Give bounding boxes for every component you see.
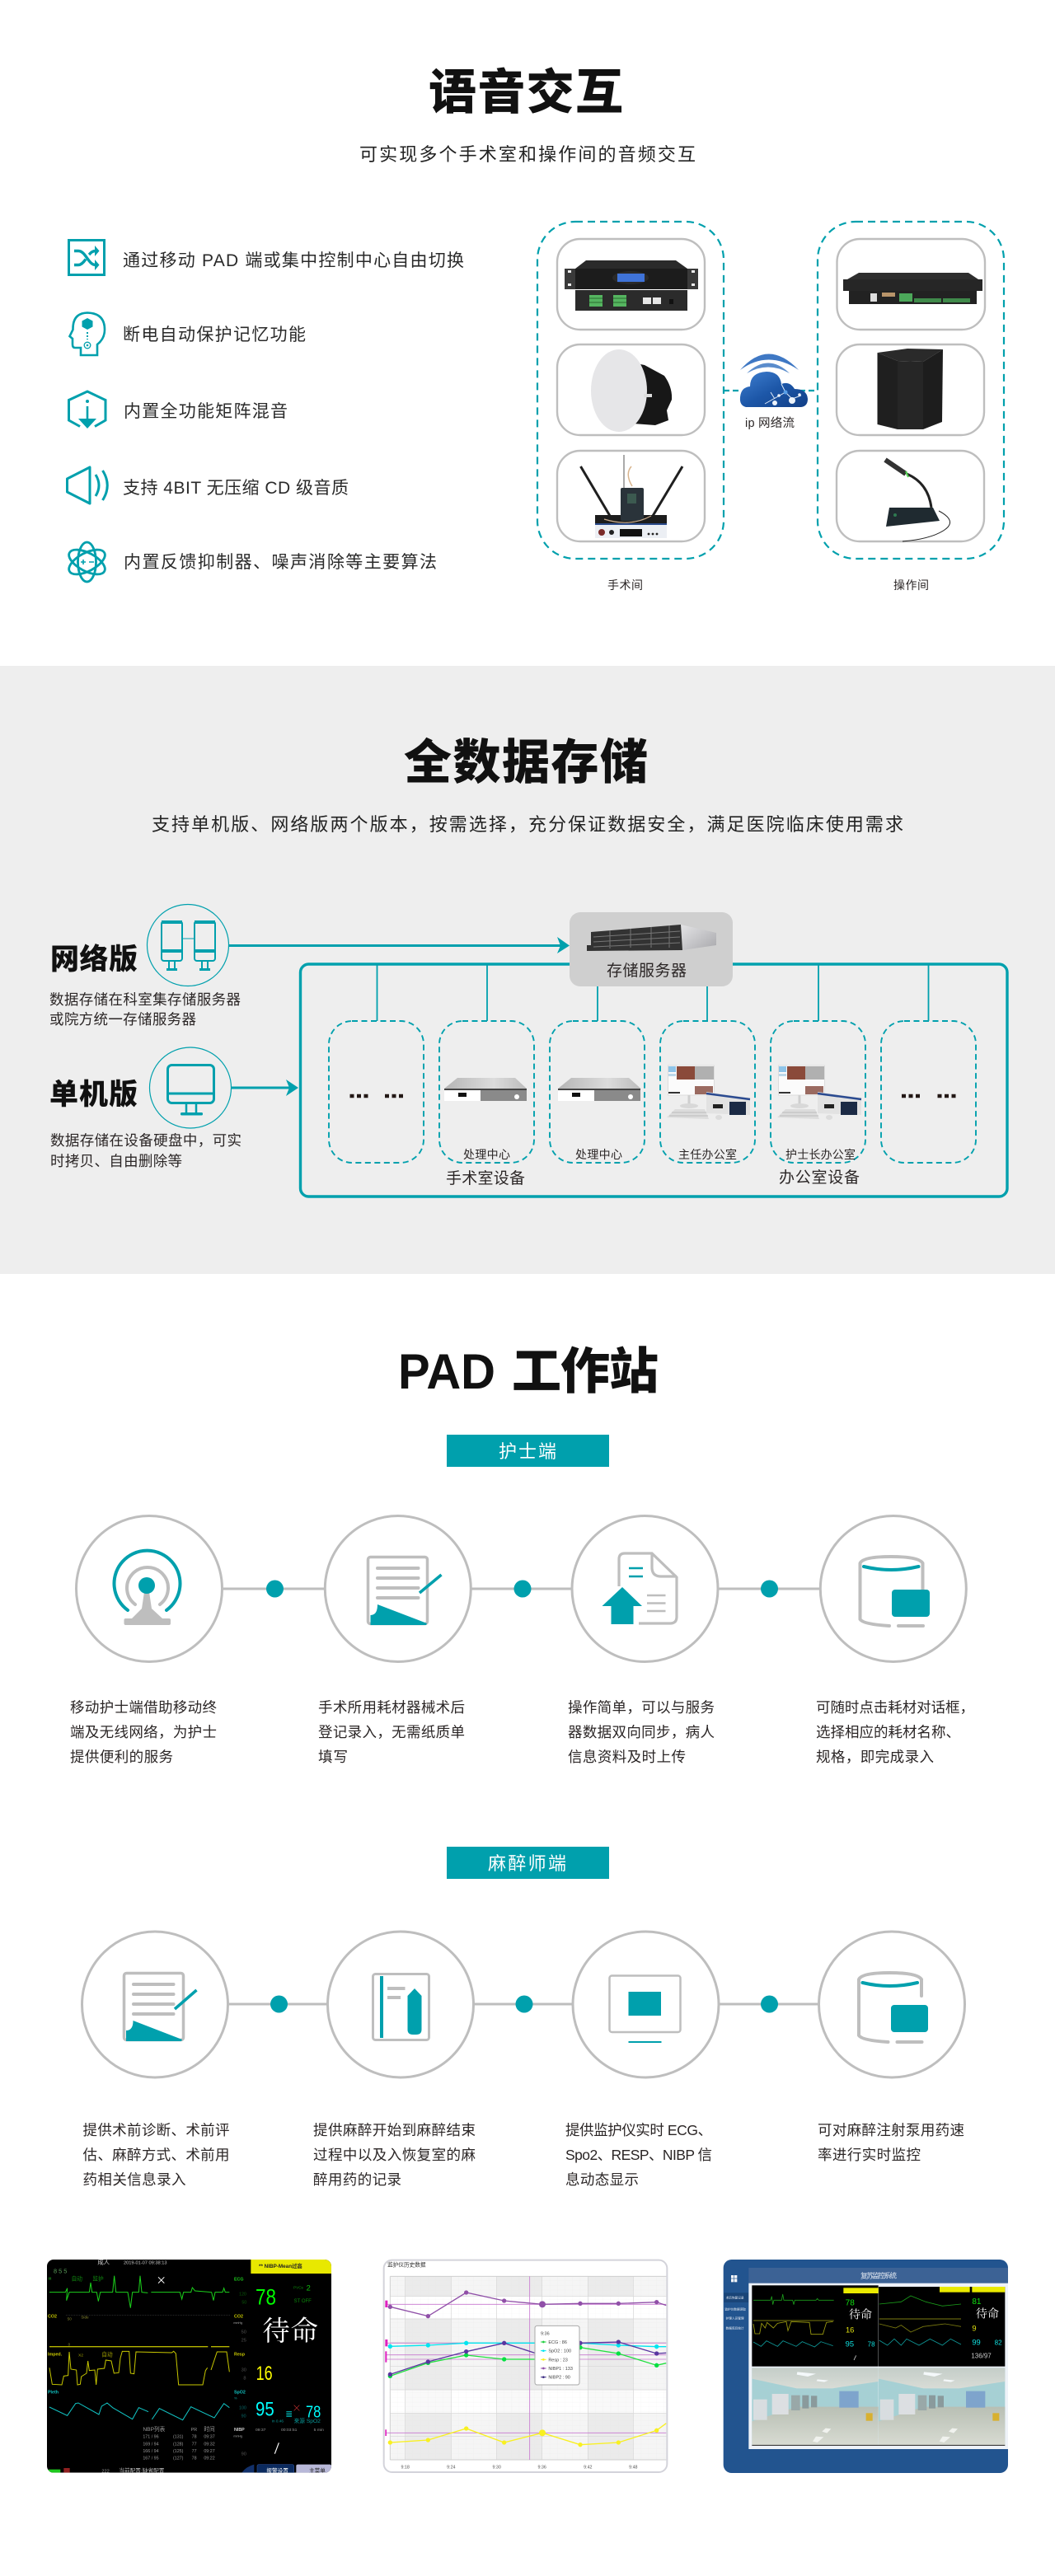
text: anesthetist step 2 description: 过程中以及入恢复室的麻 — [313, 2147, 476, 2163]
device card: gooseneck microphone — [837, 451, 984, 541]
text: step 4 description: 选择相应的耗材名称、 — [816, 1724, 960, 1740]
text: matrix mixing: 内置全功能矩阵混音 — [124, 402, 288, 421]
screenshot: recovery monitoring system: 监护仪数据读取 — [724, 2307, 746, 2311]
chart: monitor history data: ECG : 86 — [548, 2340, 567, 2345]
screenshot: patient monitor: Imped. — [48, 2353, 63, 2358]
label: processing center: 处理中心 — [575, 1148, 622, 1161]
icon: standalone edition — [150, 1047, 231, 1128]
text: power-off memory: 断电自动保护记忆功能 — [123, 326, 306, 344]
screenshot: patient monitor: mmHg — [233, 2321, 242, 2325]
screenshot: patient monitor: % — [234, 2396, 237, 2400]
screenshot: patient monitor: 09:32 — [204, 2442, 215, 2447]
step: mobile terminal — [76, 1516, 223, 1661]
text: anesthetist step 1 description: 提供术前诊断、术前评 — [82, 2122, 229, 2138]
chart: monitor history data: 9:42 — [584, 2465, 593, 2470]
chart: monitor history data: 监护仪历史数据 — [387, 2261, 426, 2269]
device card: cabinet speaker — [837, 344, 984, 435]
text: network edition description — [49, 991, 241, 1028]
screenshot: recovery monitoring system: 81 — [972, 2297, 982, 2307]
text: anesthetist step 3 description: 息动态显示 — [565, 2171, 639, 2188]
screenshot: patient monitor: 50 — [68, 2316, 72, 2321]
label: storage server: 存储服务器 — [607, 962, 687, 980]
icon: ip network cloud — [740, 354, 808, 407]
screenshot: recovery monitoring system: 复苏监控系统 — [860, 2271, 897, 2280]
screenshot: patient monitor: ** NIBP-Mean过高 — [259, 2262, 302, 2269]
screenshot: patient monitor: 自动 — [72, 2275, 82, 2283]
screenshot: patient monitor: 报警设置 — [266, 2467, 288, 2475]
step: monitor display — [573, 1932, 719, 2077]
screenshot: patient monitor: 77 — [192, 2442, 197, 2447]
connector: nurse steps — [223, 1581, 819, 1597]
screenshot: patient monitor: 8 — [243, 2376, 246, 2381]
screenshot: recovery monitoring system: 78 — [846, 2298, 855, 2307]
text: network edition description: 或院方统一存储服务器 — [49, 1011, 196, 1028]
screenshot: patient monitor: 77 — [192, 2449, 197, 2454]
title: PAD workstation: PAD — [398, 1344, 495, 1399]
box: head nurse office — [771, 1021, 865, 1163]
screenshot: patient monitor: 30 — [241, 2368, 246, 2373]
screenshot: recovery monitoring system: 护理人员管理 — [726, 2316, 744, 2321]
label: head nurse office: 护士长办公室 — [785, 1148, 856, 1161]
screenshot: patient monitor: 00:03:51 — [281, 2428, 298, 2433]
label: network edition: 网络版 — [50, 943, 138, 976]
step: consumable dialog — [820, 1516, 966, 1661]
screenshot: patient monitor: 主菜单 — [309, 2467, 326, 2475]
box: processing center 1 — [439, 1021, 534, 1163]
box: processing center 2 — [550, 1021, 645, 1163]
screenshot: patient monitor: X2 — [78, 2353, 83, 2358]
screenshot: recovery monitoring system: 待命 — [976, 2305, 999, 2321]
title: PAD workstation: 工作站 — [512, 1344, 659, 1399]
screenshot: patient monitor: 自动 — [101, 2351, 113, 2358]
screenshot: patient monitor: Pleth — [48, 2390, 59, 2395]
screenshot: patient monitor: CO2 — [234, 2315, 243, 2320]
icon: network edition — [147, 905, 229, 986]
text: anesthetist step 2 description: 提供麻醉开始到麻醉结束 — [313, 2122, 476, 2138]
screenshot: patient monitor: 0 — [68, 2343, 71, 2347]
chart: monitor history data — [384, 2260, 667, 2472]
network links — [377, 964, 928, 1021]
screenshot: patient monitor: 100 — [239, 2405, 246, 2410]
screenshot: patient monitor: 95 — [256, 2399, 274, 2421]
chart: monitor history data: Resp : 23 — [548, 2358, 568, 2363]
panel: control room group — [818, 222, 1004, 592]
screenshot: recovery monitoring system: 99 — [972, 2338, 981, 2346]
screenshot: patient monitor: III — [48, 2277, 51, 2282]
screenshot: patient monitor: in 0.46 — [272, 2419, 284, 2423]
panel: operating room group — [537, 222, 724, 592]
device card: rack host — [837, 239, 985, 330]
icon: speaker — [68, 467, 107, 503]
screenshot: patient monitor: 120 — [239, 2293, 246, 2297]
screenshot: patient monitor: 50 — [241, 2300, 246, 2305]
screenshot: patient monitor: (127) — [173, 2457, 184, 2461]
tag: anesthetist side: 麻醉师端 — [488, 1853, 566, 1874]
icon: shuffle — [69, 241, 104, 275]
screenshot: patient monitor: CO2 — [48, 2315, 57, 2320]
chart: monitor history data: 9:18 — [401, 2465, 410, 2470]
screenshot: patient monitor: PVCs — [293, 2286, 304, 2290]
chart: monitor history data: 9:36 — [537, 2465, 546, 2470]
text: anesthetist step 4 description — [818, 2122, 964, 2163]
text: standalone edition description: 数据存储在设备硬盘中，可实 — [50, 1132, 241, 1149]
text: anesthetist step 1 description: 估、麻醉方式、术前用 — [82, 2147, 229, 2163]
screenshot: recovery monitoring system: 82 — [995, 2339, 1002, 2346]
chart: monitor history data: 9:48 — [629, 2465, 638, 2470]
text: anesthetist step 2 description — [313, 2122, 476, 2188]
chart: monitor history data: 9:24 — [447, 2465, 456, 2470]
text: step 3 description: 操作简单，可以与服务 — [568, 1699, 715, 1716]
step: pre-op record — [82, 1932, 227, 2077]
screenshot: patient monitor: 222 — [101, 2470, 110, 2475]
device card: audio processor — [557, 239, 705, 330]
icon: head memory — [69, 313, 105, 355]
step: upload — [572, 1516, 718, 1661]
tag: nurse side — [447, 1435, 609, 1467]
title: voice interaction: 语音交互 — [429, 66, 623, 119]
screenshot: patient monitor: PR — [191, 2428, 197, 2433]
text: anesthetist step 3 description — [565, 2122, 712, 2188]
label: standalone edition: 单机版 — [49, 1079, 138, 1111]
screenshot: patient monitor: 78 — [256, 2285, 276, 2310]
panel: storage server — [570, 912, 733, 986]
text: network edition description: 数据存储在科室集存储服务器 — [49, 991, 241, 1008]
screenshot: patient monitor: 待命 — [262, 2309, 318, 2349]
screenshot: patient monitor: (131) — [173, 2435, 184, 2440]
screenshot: patient monitor: 166 / 94 — [143, 2449, 159, 2454]
label: ip stream: ip 网络流 — [745, 416, 795, 430]
screenshot: recovery monitoring system — [724, 2260, 1008, 2473]
chart: monitor history data: NIBP1 : 133 — [548, 2367, 573, 2372]
chart: monitor history data: NIBP2 : 90 — [548, 2376, 570, 2381]
device card: ceiling speaker — [557, 344, 705, 435]
connector: anesthetist steps — [228, 1996, 818, 2012]
text: step 2 description: 填写 — [318, 1749, 348, 1765]
screenshot: recovery monitoring system: 9 — [972, 2325, 977, 2333]
screenshot: patient monitor: 78 — [192, 2457, 197, 2461]
subtitle: 支持单机版、网络版两个版本，按需选择，充分保证数据安全，满足医院临床使用需求 — [152, 814, 903, 835]
screenshot: patient monitor: 09:37 — [256, 2428, 266, 2433]
screenshot: patient monitor: NIBP — [234, 2428, 245, 2433]
text: algorithms: 内置反馈抑制器、噪声消除等主要算法 — [124, 553, 437, 572]
text: step 2 description: 登记录入，无需纸质单 — [318, 1724, 465, 1740]
text: anesthetist step 3 description: Spo2、RESP、NIBP 信 — [565, 2147, 712, 2163]
screenshot: patient monitor: 50 — [241, 2330, 246, 2335]
text: step 3 description: 器数据双向同步，病人 — [568, 1724, 715, 1740]
text: step 3 description — [568, 1699, 715, 1765]
text: CD quality: 支持 4BIT 无压缩 CD 级音质 — [123, 479, 349, 498]
screenshot: patient monitor: ST OFF — [294, 2299, 312, 2304]
text: step 2 description — [318, 1699, 465, 1765]
screenshot: patient monitor: 2019-01-07 09:38:13 — [124, 2260, 167, 2265]
label: control room: 操作间 — [893, 578, 929, 592]
screenshot: patient monitor: 171 / 96 — [143, 2435, 159, 2440]
screenshot: patient monitor: 09:37 — [204, 2435, 215, 2440]
screenshot: patient monitor: NBP列表 — [143, 2425, 166, 2433]
arrow: network edition to storage server — [229, 937, 570, 953]
text: step 4 description: 规格，即完成录入 — [816, 1749, 934, 1765]
screenshot: patient monitor: 09:27 — [204, 2449, 215, 2454]
panel: full data storage — [0, 666, 1055, 1274]
tag: nurse side: 护士端 — [499, 1441, 556, 1462]
label: office devices: 办公室设备 — [779, 1169, 860, 1187]
device frame — [300, 964, 1007, 1197]
text: step 1 description — [70, 1699, 218, 1765]
label: processing center: 处理中心 — [463, 1148, 510, 1161]
tag: anesthetist side — [447, 1847, 609, 1879]
screenshot: patient monitor: 25 — [241, 2339, 246, 2344]
screenshot: patient monitor: 8 5 5 — [54, 2268, 67, 2275]
title: PAD workstation — [398, 1344, 659, 1399]
screenshot: recovery monitoring system: 数据库后统计 — [726, 2326, 744, 2330]
screenshot: patient monitor: SpO2 — [234, 2390, 246, 2395]
screenshot: patient monitor: 时间 — [204, 2425, 215, 2433]
screenshot: patient monitor: 2 — [307, 2283, 311, 2292]
text: step 4 description: 可随时点击耗材对话框， — [816, 1699, 974, 1716]
text: switching: 通过移动 PAD 端或集中控制中心自由切换 — [123, 251, 464, 270]
screenshot: patient monitor: (128) — [173, 2442, 184, 2447]
screenshot: recovery monitoring system: 术后恢复记录 — [726, 2296, 744, 2300]
icon: matrix mix — [69, 391, 106, 429]
screenshot: patient monitor: 90 — [241, 2414, 246, 2419]
text: step 1 description: 移动护士端借助移动终 — [70, 1699, 218, 1716]
screenshot: patient monitor: 09:22 — [204, 2457, 215, 2461]
text: step 4 description — [816, 1699, 974, 1765]
feature list — [65, 241, 464, 582]
text: standalone edition description — [50, 1132, 241, 1169]
box: unspecified office device — [881, 1021, 976, 1163]
panel: PAD workstation — [47, 1344, 1008, 2475]
screenshot: patient monitor: 78 — [192, 2435, 197, 2440]
arrow: standalone edition to device frame — [231, 1080, 298, 1096]
screenshot: recovery monitoring system: 待命 — [849, 2306, 872, 2322]
screenshot: patient monitor: 90 — [241, 2452, 246, 2457]
chart: monitor history data: SpO2 : 100 — [548, 2349, 571, 2354]
title: full data storage: 全数据存储 — [404, 736, 648, 789]
screenshot: patient monitor: 169 / 94 — [143, 2442, 159, 2447]
screenshot: patient monitor: 成人 — [97, 2258, 110, 2265]
screenshot: patient monitor: Side — [81, 2315, 89, 2319]
box: director office — [660, 1021, 755, 1163]
text: step 2 description: 手术所用耗材器械术后 — [318, 1699, 465, 1716]
screenshot: patient monitor: Resp — [234, 2353, 246, 2358]
label: operating room devices: 手术室设备 — [446, 1169, 525, 1187]
screenshot: patient monitor: 当前配置:缺省配置 — [119, 2467, 165, 2475]
step: consumables record — [325, 1516, 471, 1661]
chart: monitor history data: 9:36 — [541, 2331, 550, 2336]
device card: wireless microphone receiver — [557, 451, 705, 541]
screenshot: patient monitor: ECG — [234, 2277, 244, 2282]
screenshot: patient monitor: (125) — [173, 2449, 184, 2454]
screenshot: patient monitor: 来源 SpO2 — [294, 2417, 321, 2424]
text: standalone edition description: 时拷贝、自由删除等 — [50, 1153, 182, 1169]
chart: monitor history data: 9:30 — [492, 2465, 501, 2470]
screenshot: patient monitor: 16 — [256, 2363, 273, 2385]
screenshot: patient monitor: 78 — [306, 2402, 321, 2421]
screenshot: patient monitor: 5 min — [314, 2428, 324, 2433]
text: anesthetist step 1 description — [82, 2122, 229, 2188]
subtitle: 可实现多个手术室和操作间的音频交互 — [359, 144, 696, 165]
screenshot: recovery monitoring system: 95 — [846, 2339, 854, 2348]
label: operating room: 手术间 — [607, 578, 643, 592]
screenshot: patient monitor: 监护 — [92, 2275, 104, 2283]
text: anesthetist step 2 description: 醉用药的记录 — [313, 2171, 401, 2188]
text: step 3 description: 信息资料及时上传 — [568, 1749, 686, 1765]
text: step 1 description: 端及无线网络，为护士 — [70, 1724, 217, 1740]
screenshot: patient monitor — [47, 2258, 331, 2475]
screenshot: recovery monitoring system: 78 — [868, 2340, 875, 2348]
screenshot: recovery monitoring system: 136/97 — [971, 2353, 992, 2360]
text: anesthetist step 3 description: 提供监护仪实时 ECG、 — [565, 2122, 712, 2138]
text: anesthetist step 4 description: 率进行实时监控 — [818, 2147, 921, 2163]
label: director office: 主任办公室 — [678, 1148, 737, 1161]
screenshot: patient monitor: mmHg — [233, 2435, 242, 2438]
screenshot: patient monitor: 167 / 95 — [143, 2457, 159, 2461]
step: syringe pump — [819, 1932, 964, 2077]
icon: atom — [65, 542, 109, 582]
box: unspecified device — [329, 1021, 424, 1163]
connector: ip stream dashed link — [724, 390, 818, 391]
screenshot: recovery monitoring system: 16 — [846, 2326, 854, 2335]
text: step 1 description: 提供便利的服务 — [70, 1749, 173, 1765]
step: anesthesia medication record — [328, 1932, 473, 2077]
text: anesthetist step 4 description: 可对麻醉注射泵用药速 — [818, 2122, 964, 2138]
text: anesthetist step 1 description: 药相关信息录入 — [82, 2171, 186, 2188]
recovery room camera views — [752, 2368, 1005, 2445]
